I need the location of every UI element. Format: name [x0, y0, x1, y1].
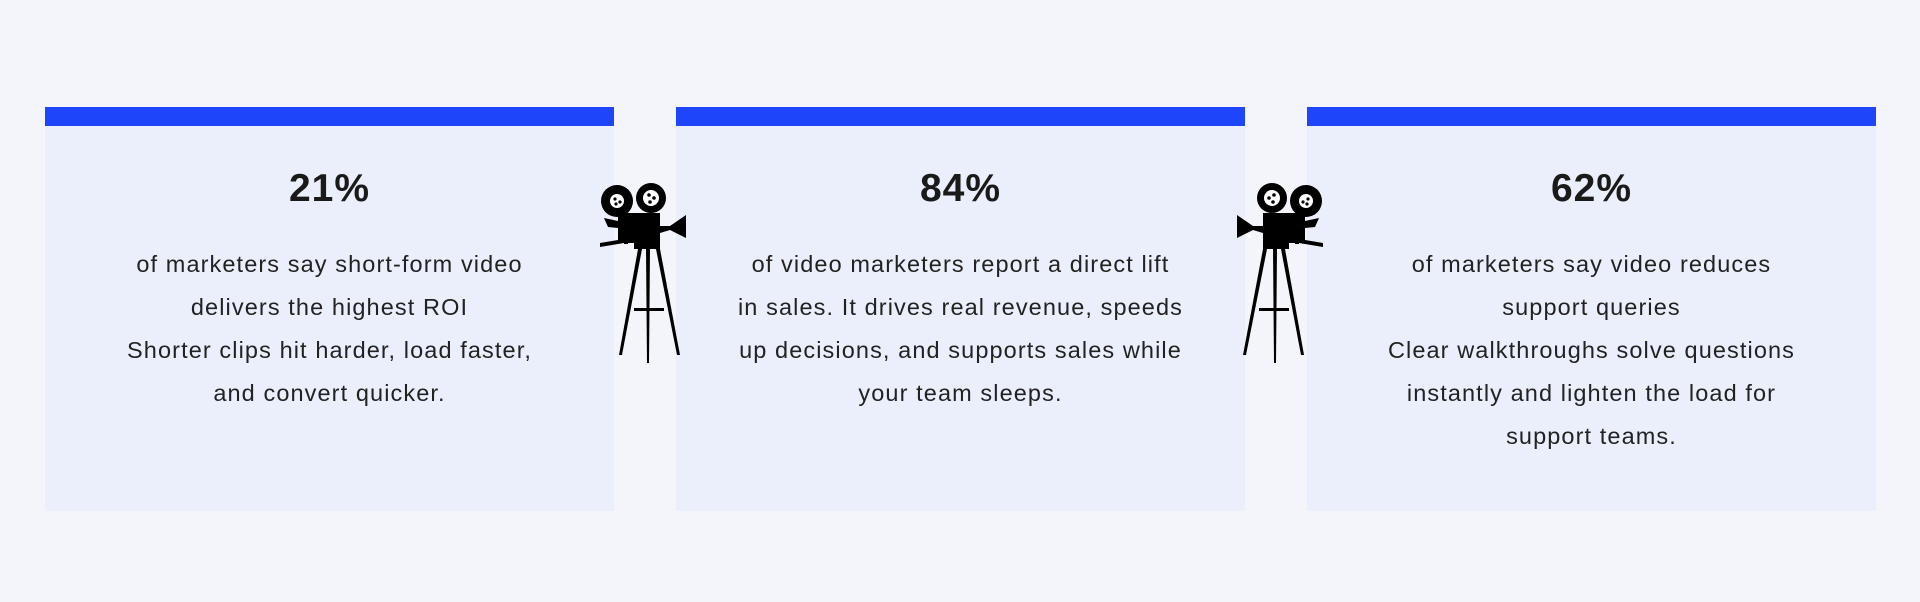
text: support queries [1388, 251, 1795, 449]
panel: 84% [676, 107, 1245, 511]
heading: 84%: 84% [920, 167, 1001, 210]
heading: 62%: 62% [1551, 167, 1632, 210]
icon: film camera left [600, 183, 686, 363]
text: sales lift [738, 251, 1183, 406]
heading: 21%: 21% [289, 167, 370, 210]
text: short-form video [127, 251, 532, 406]
text: short-form video: and convert quicker. [213, 380, 446, 406]
text: support queries: Clear walkthroughs solve questions [1388, 337, 1795, 363]
text: support queries: instantly and lighten the load for [1407, 380, 1776, 406]
panel: 62% [1307, 107, 1876, 511]
text: short-form video: delivers the highest ROI [191, 294, 468, 320]
text: support queries: support queries [1502, 294, 1681, 320]
icon: film camera right [1237, 183, 1323, 363]
text: short-form video: of marketers say short-form video [136, 251, 523, 277]
text: support queries: of marketers say video reduces [1412, 251, 1771, 277]
text: sales lift: your team sleeps. [858, 380, 1063, 406]
text: sales lift: of video marketers report a direct lift [752, 251, 1169, 277]
text: sales lift: up decisions, and supports sales while [739, 337, 1182, 363]
text: sales lift: in sales. It drives real revenue, speeds [738, 294, 1183, 320]
text: short-form video: Shorter clips hit harder, load faster, [127, 337, 532, 363]
panel: 21% [45, 107, 614, 511]
text: support queries: support teams. [1506, 423, 1677, 449]
